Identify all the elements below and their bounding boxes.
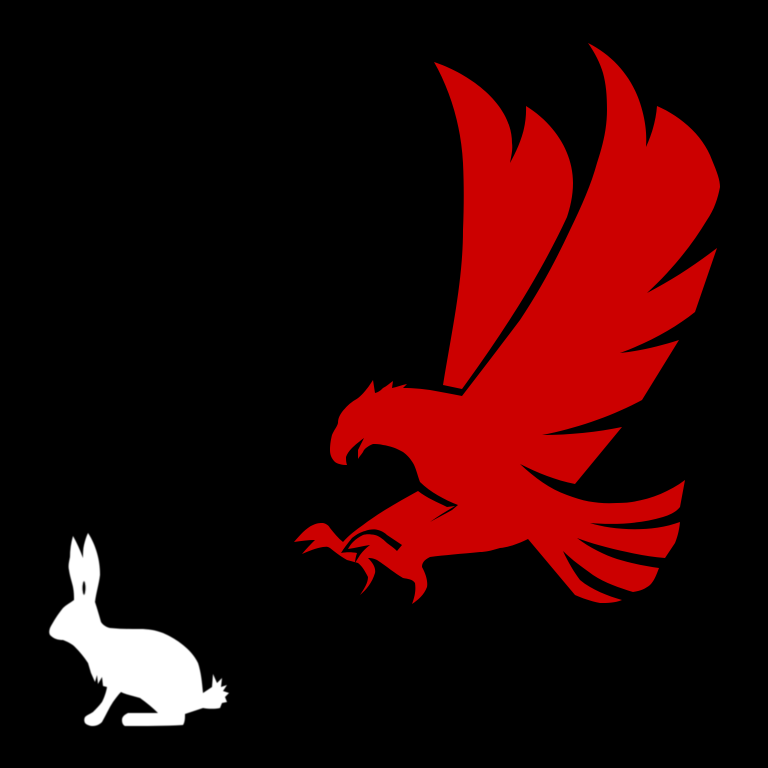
eagle leg feather line xyxy=(341,529,402,563)
eagle body, head, main wing, tail and legs xyxy=(294,43,720,604)
gap between hare ears xyxy=(82,581,86,595)
hare xyxy=(49,533,229,726)
hare body xyxy=(49,533,229,726)
eagle xyxy=(294,43,720,604)
eagle back wing xyxy=(434,62,573,389)
